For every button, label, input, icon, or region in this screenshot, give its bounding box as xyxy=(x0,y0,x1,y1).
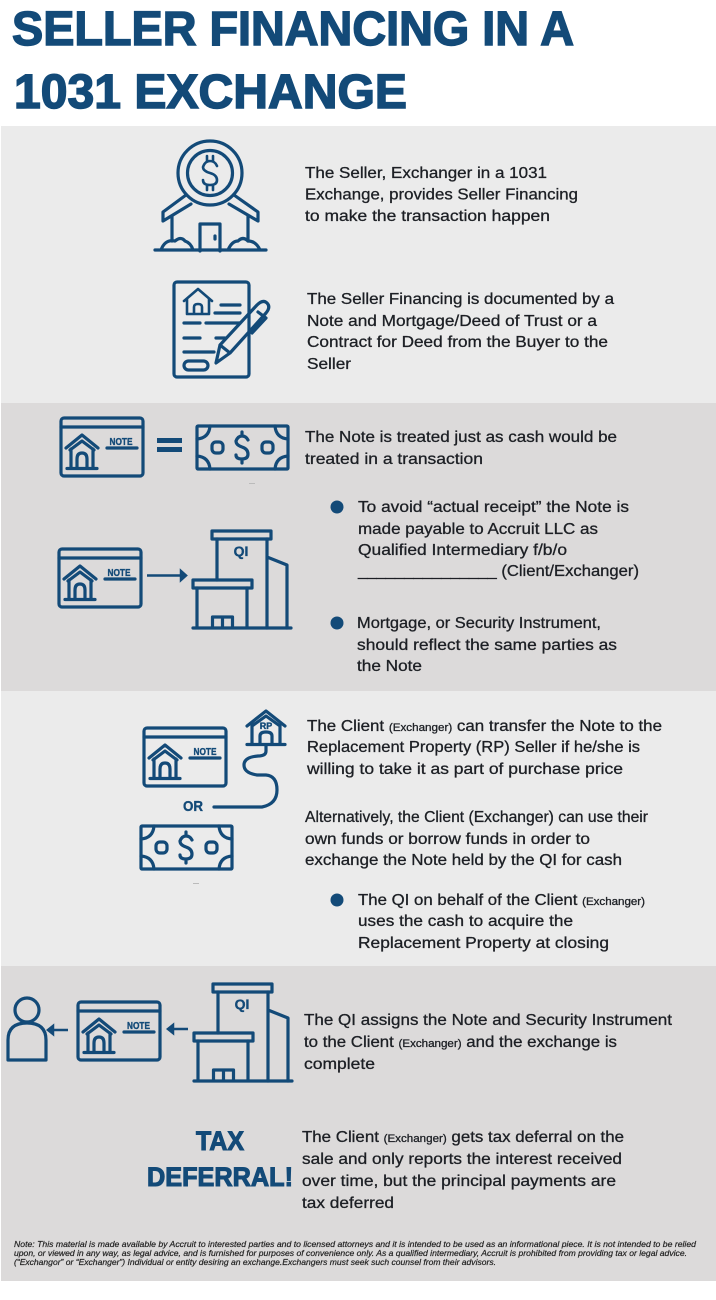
icon: cash bill xyxy=(197,426,288,469)
text: tax deferral details: over time, but the principal payments are xyxy=(302,1173,616,1190)
bullet: actual receipt: _______________ (Client/Exchanger) xyxy=(357,563,639,580)
text: seller financing documents: Note and Mortgage/Deed of Trust or a xyxy=(307,313,597,330)
icon: note card to QI xyxy=(59,549,141,607)
text: alternative funds: exchange the Note held by the QI for cash xyxy=(305,852,622,869)
icon: replacement property house xyxy=(247,711,285,744)
icon: QI building: QI xyxy=(235,996,249,1012)
title: 1031 EXCHANGE xyxy=(14,66,407,119)
icon: person xyxy=(8,998,46,1060)
text: seller provides financing: to make the transaction happen xyxy=(305,208,550,225)
arrow: QI to note xyxy=(168,1025,188,1033)
heading: tax deferral xyxy=(147,1126,293,1192)
arrow: connector to OR xyxy=(214,745,277,807)
icon: cash bill xyxy=(141,826,232,869)
label: or: OR xyxy=(183,799,203,815)
text: note as cash: treated in a transaction xyxy=(305,451,483,468)
icon: note card xyxy=(78,1002,160,1060)
panel: note treated as cash xyxy=(1,403,716,691)
icon: QI building xyxy=(193,531,291,628)
icon: house with dollar badge xyxy=(155,141,266,251)
arrow: note to QI xyxy=(147,571,186,580)
text: note as cash: The Note is treated just as cash would be xyxy=(305,429,617,446)
disclaimer note xyxy=(14,1239,696,1267)
icon: note card: NOTE xyxy=(110,437,133,448)
text: alternative funds xyxy=(305,809,649,869)
icon: document and pen xyxy=(174,282,269,377)
text: QI assigns note: complete xyxy=(304,1056,375,1073)
text: seller provides financing: The Seller, Exchanger in a 1031 xyxy=(305,165,547,182)
text: QI assigns note: to the Client (Exchanger) and the exchange is xyxy=(304,1034,617,1051)
icon: note card: NOTE xyxy=(127,1021,150,1032)
text: transfer note: Replacement Property (RP) Seller if he/she is xyxy=(307,739,640,756)
text: seller provides financing xyxy=(305,165,578,225)
bullet: actual receipt: Qualified Intermediary f/b/o xyxy=(358,542,567,559)
icon: note card to QI: NOTE xyxy=(108,568,131,579)
text: transfer note xyxy=(306,718,662,778)
panel: assignment and tax deferral xyxy=(1,966,716,1281)
bullet: security instrument: Mortgage, or Security Instrument, xyxy=(357,615,601,632)
panel: seller financing xyxy=(1,126,716,403)
text: seller financing documents xyxy=(307,291,614,373)
text: QI assigns note xyxy=(304,1012,673,1073)
text: transfer note: willing to take it as part of purchase price xyxy=(306,761,623,778)
text: transfer note: The Client (Exchanger) can transfer the Note to the xyxy=(307,718,662,735)
bullet: actual receipt xyxy=(330,499,639,580)
bullet: QI acquires property: The QI on behalf of the Client (Exchanger) xyxy=(358,892,645,909)
heading: tax deferral: TAX xyxy=(196,1126,244,1156)
text: seller provides financing: Exchange, provides Seller Financing xyxy=(305,186,578,204)
title: SELLER FINANCING IN A xyxy=(12,3,574,56)
bullet: actual receipt: made payable to Accruit LLC as xyxy=(358,521,598,538)
icon: QI building: QI xyxy=(234,543,248,559)
icon: QI building xyxy=(194,984,292,1081)
text: tax deferral details: tax deferred xyxy=(302,1195,394,1212)
icon: note card: NOTE xyxy=(194,747,217,758)
bullet: QI acquires property xyxy=(330,892,645,952)
panel: transfer the note xyxy=(1,691,716,966)
heading: tax deferral: DEFERRAL! xyxy=(147,1162,293,1192)
icon: note card xyxy=(144,728,226,786)
text: tax deferral details: The Client (Exchanger) gets tax deferral on the xyxy=(302,1129,624,1146)
text: seller financing documents: Seller xyxy=(307,356,352,373)
text: QI assigns note: The QI assigns the Note and Security Instrument xyxy=(304,1012,673,1029)
bullet: actual receipt: To avoid “actual receipt” the Note is xyxy=(358,499,629,516)
text: note as cash xyxy=(305,429,617,468)
bullet: security instrument xyxy=(330,615,617,675)
disclaimer note: (“Exchangor” or “Exchanger”) Individual or entity desiring an exchange.Exchangers must seek such counsel from their advisors. xyxy=(14,1257,496,1267)
bullet: QI acquires property: uses the cash to acquire the xyxy=(358,913,573,930)
icon: note card xyxy=(61,418,143,476)
text: seller financing documents: The Seller Financing is documented by a xyxy=(307,291,614,308)
text: tax deferral details xyxy=(302,1129,624,1212)
icon: equals sign xyxy=(157,438,182,452)
text: tax deferral details: sale and only reports the interest received xyxy=(302,1151,622,1168)
text: alternative funds: Alternatively, the Client (Exchanger) can use their xyxy=(305,809,649,826)
arrow: note to person xyxy=(48,1026,68,1034)
title xyxy=(12,3,574,119)
text: seller financing documents: Contract for Deed from the Buyer to the xyxy=(307,334,608,351)
text: alternative funds: own funds or borrow funds in order to xyxy=(305,831,590,848)
bullet: security instrument: should reflect the same parties as xyxy=(357,637,617,654)
disclaimer note: Note: This material is made available by Accruit to interested parties and to licensed attorneys and it is intended to be used as an informational piece. It is not intended to be relied xyxy=(14,1239,696,1249)
bullet: security instrument: the Note xyxy=(357,658,422,675)
bullet: QI acquires property: Replacement Property at closing xyxy=(358,935,609,952)
icon: replacement property house: RP xyxy=(260,721,272,731)
disclaimer note: upon, or viewed in any way, as legal advice, and is furnished for purposes of convenience only. As a qualified intermediary, Accruit is prohibited from providing tax or legal advice. xyxy=(14,1248,687,1258)
